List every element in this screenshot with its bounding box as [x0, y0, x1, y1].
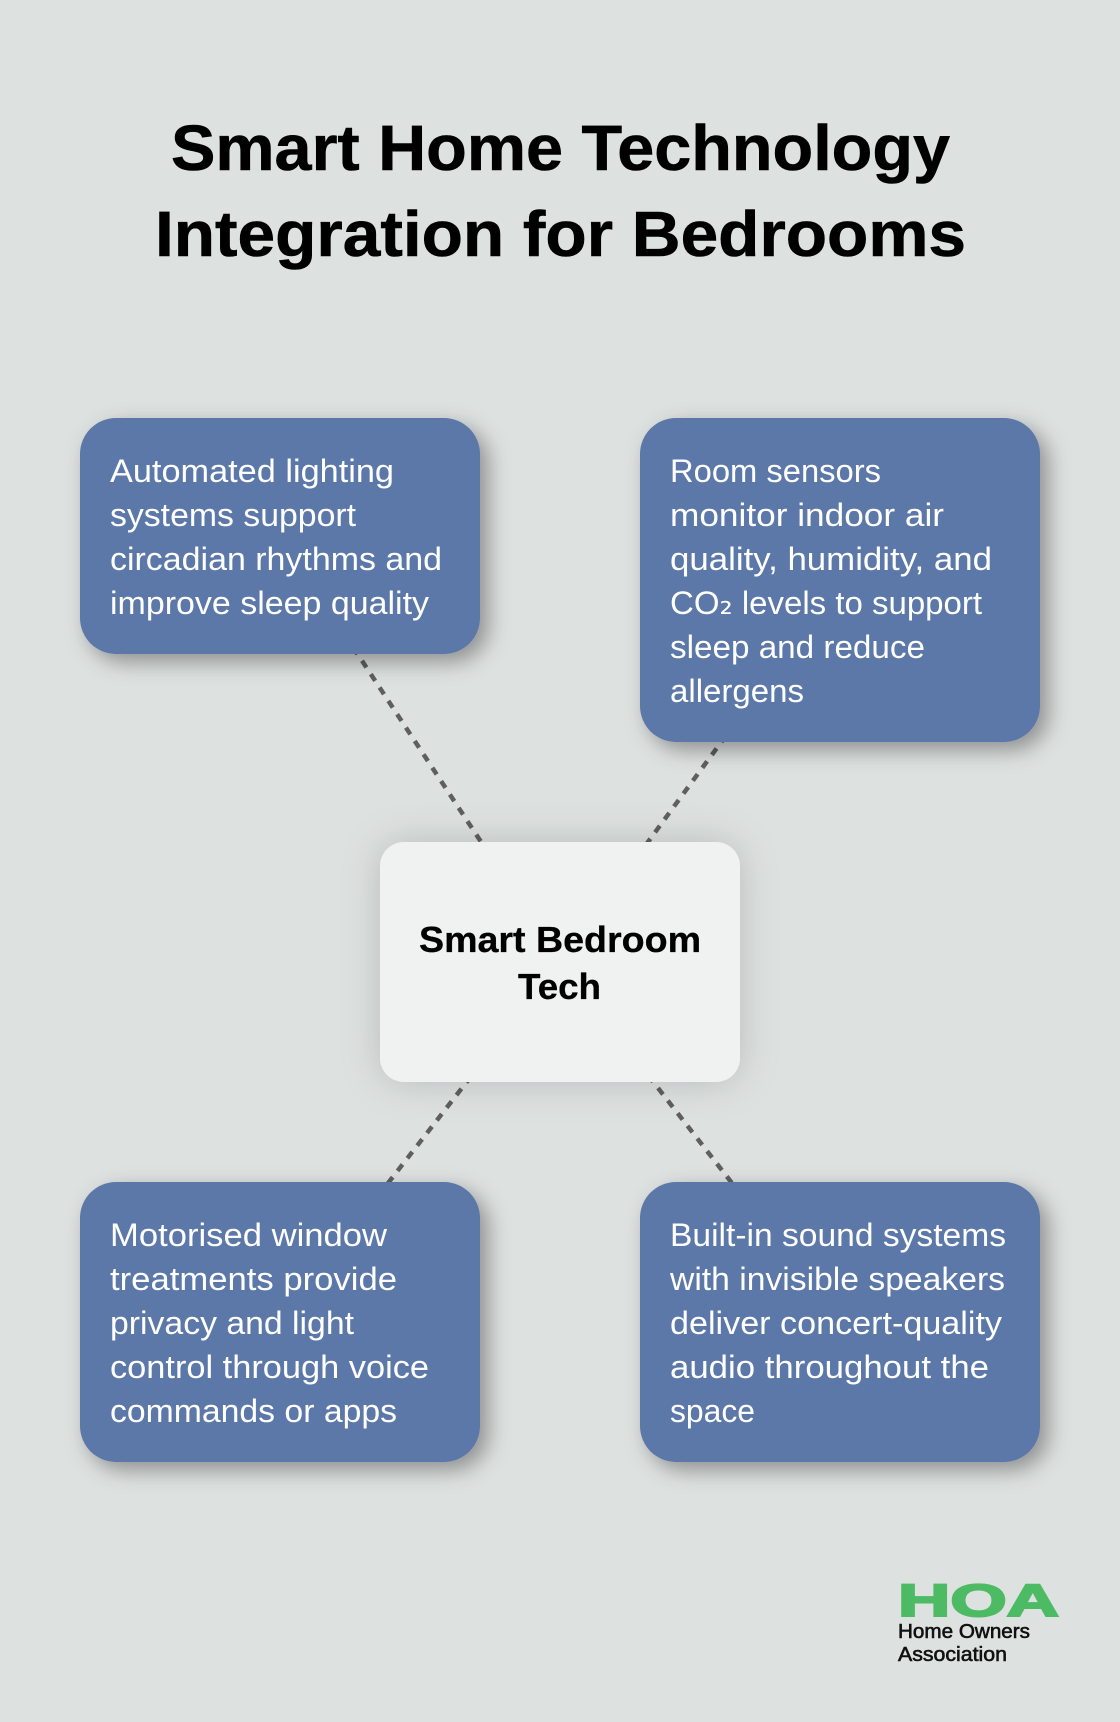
panel: built-in sound systems: with invisible speakers [669, 1261, 1005, 1297]
connector: lighting to centre [280, 536, 560, 962]
connector: window treatments to centre [280, 962, 560, 1322]
panel: room sensors: CO₂ levels to support [670, 584, 982, 622]
panel: room sensors: allergens [670, 673, 804, 709]
logo: HOA Home Owners Association: Association [898, 1644, 1007, 1666]
panel: automated lighting [80, 418, 480, 654]
panel: built-in sound systems: space [670, 1393, 755, 1429]
logo: HOA Home Owners Association [898, 1575, 1059, 1666]
panel: room sensors: quality, humidity, and [670, 541, 992, 577]
connector: sensors to centre [560, 580, 840, 962]
connector: sound systems to centre [560, 962, 840, 1322]
panel: automated lighting: circadian rhythms and [110, 541, 442, 577]
panel: built-in sound systems: audio throughout the [670, 1349, 989, 1385]
panel: room sensors: monitor indoor air [670, 497, 944, 533]
panel: motorised window treatments: Motorised window [110, 1217, 388, 1253]
title: Smart Home Technology [171, 112, 950, 184]
title [155, 112, 966, 270]
panel: motorised window treatments [80, 1182, 480, 1462]
panel: built-in sound systems [640, 1182, 1040, 1462]
title: Integration for Bedrooms [155, 198, 966, 270]
panel: room sensors [640, 418, 1040, 742]
panel: central topic: Smart Bedroom [419, 919, 701, 960]
logo: HOA Home Owners Association: HOA [898, 1575, 1059, 1626]
panel: room sensors: Room sensors [670, 453, 881, 489]
logo: HOA Home Owners Association: Home Owners [898, 1621, 1030, 1643]
panel: built-in sound systems: Built-in sound systems [670, 1217, 1006, 1253]
panel: motorised window treatments: privacy and light [110, 1305, 354, 1341]
panel: motorised window treatments: control through voice [110, 1349, 429, 1385]
panel: automated lighting: Automated lighting [110, 453, 394, 489]
panel: automated lighting: systems support [110, 497, 356, 533]
panel: built-in sound systems: deliver concert-quality [670, 1305, 1002, 1341]
panel: motorised window treatments: treatments provide [110, 1261, 397, 1297]
panel: central topic [380, 842, 740, 1082]
panel: room sensors: sleep and reduce [670, 629, 925, 665]
panel: automated lighting: improve sleep quality [110, 585, 429, 621]
panel: central topic: Tech [518, 966, 601, 1007]
panel: motorised window treatments: commands or apps [110, 1393, 397, 1429]
